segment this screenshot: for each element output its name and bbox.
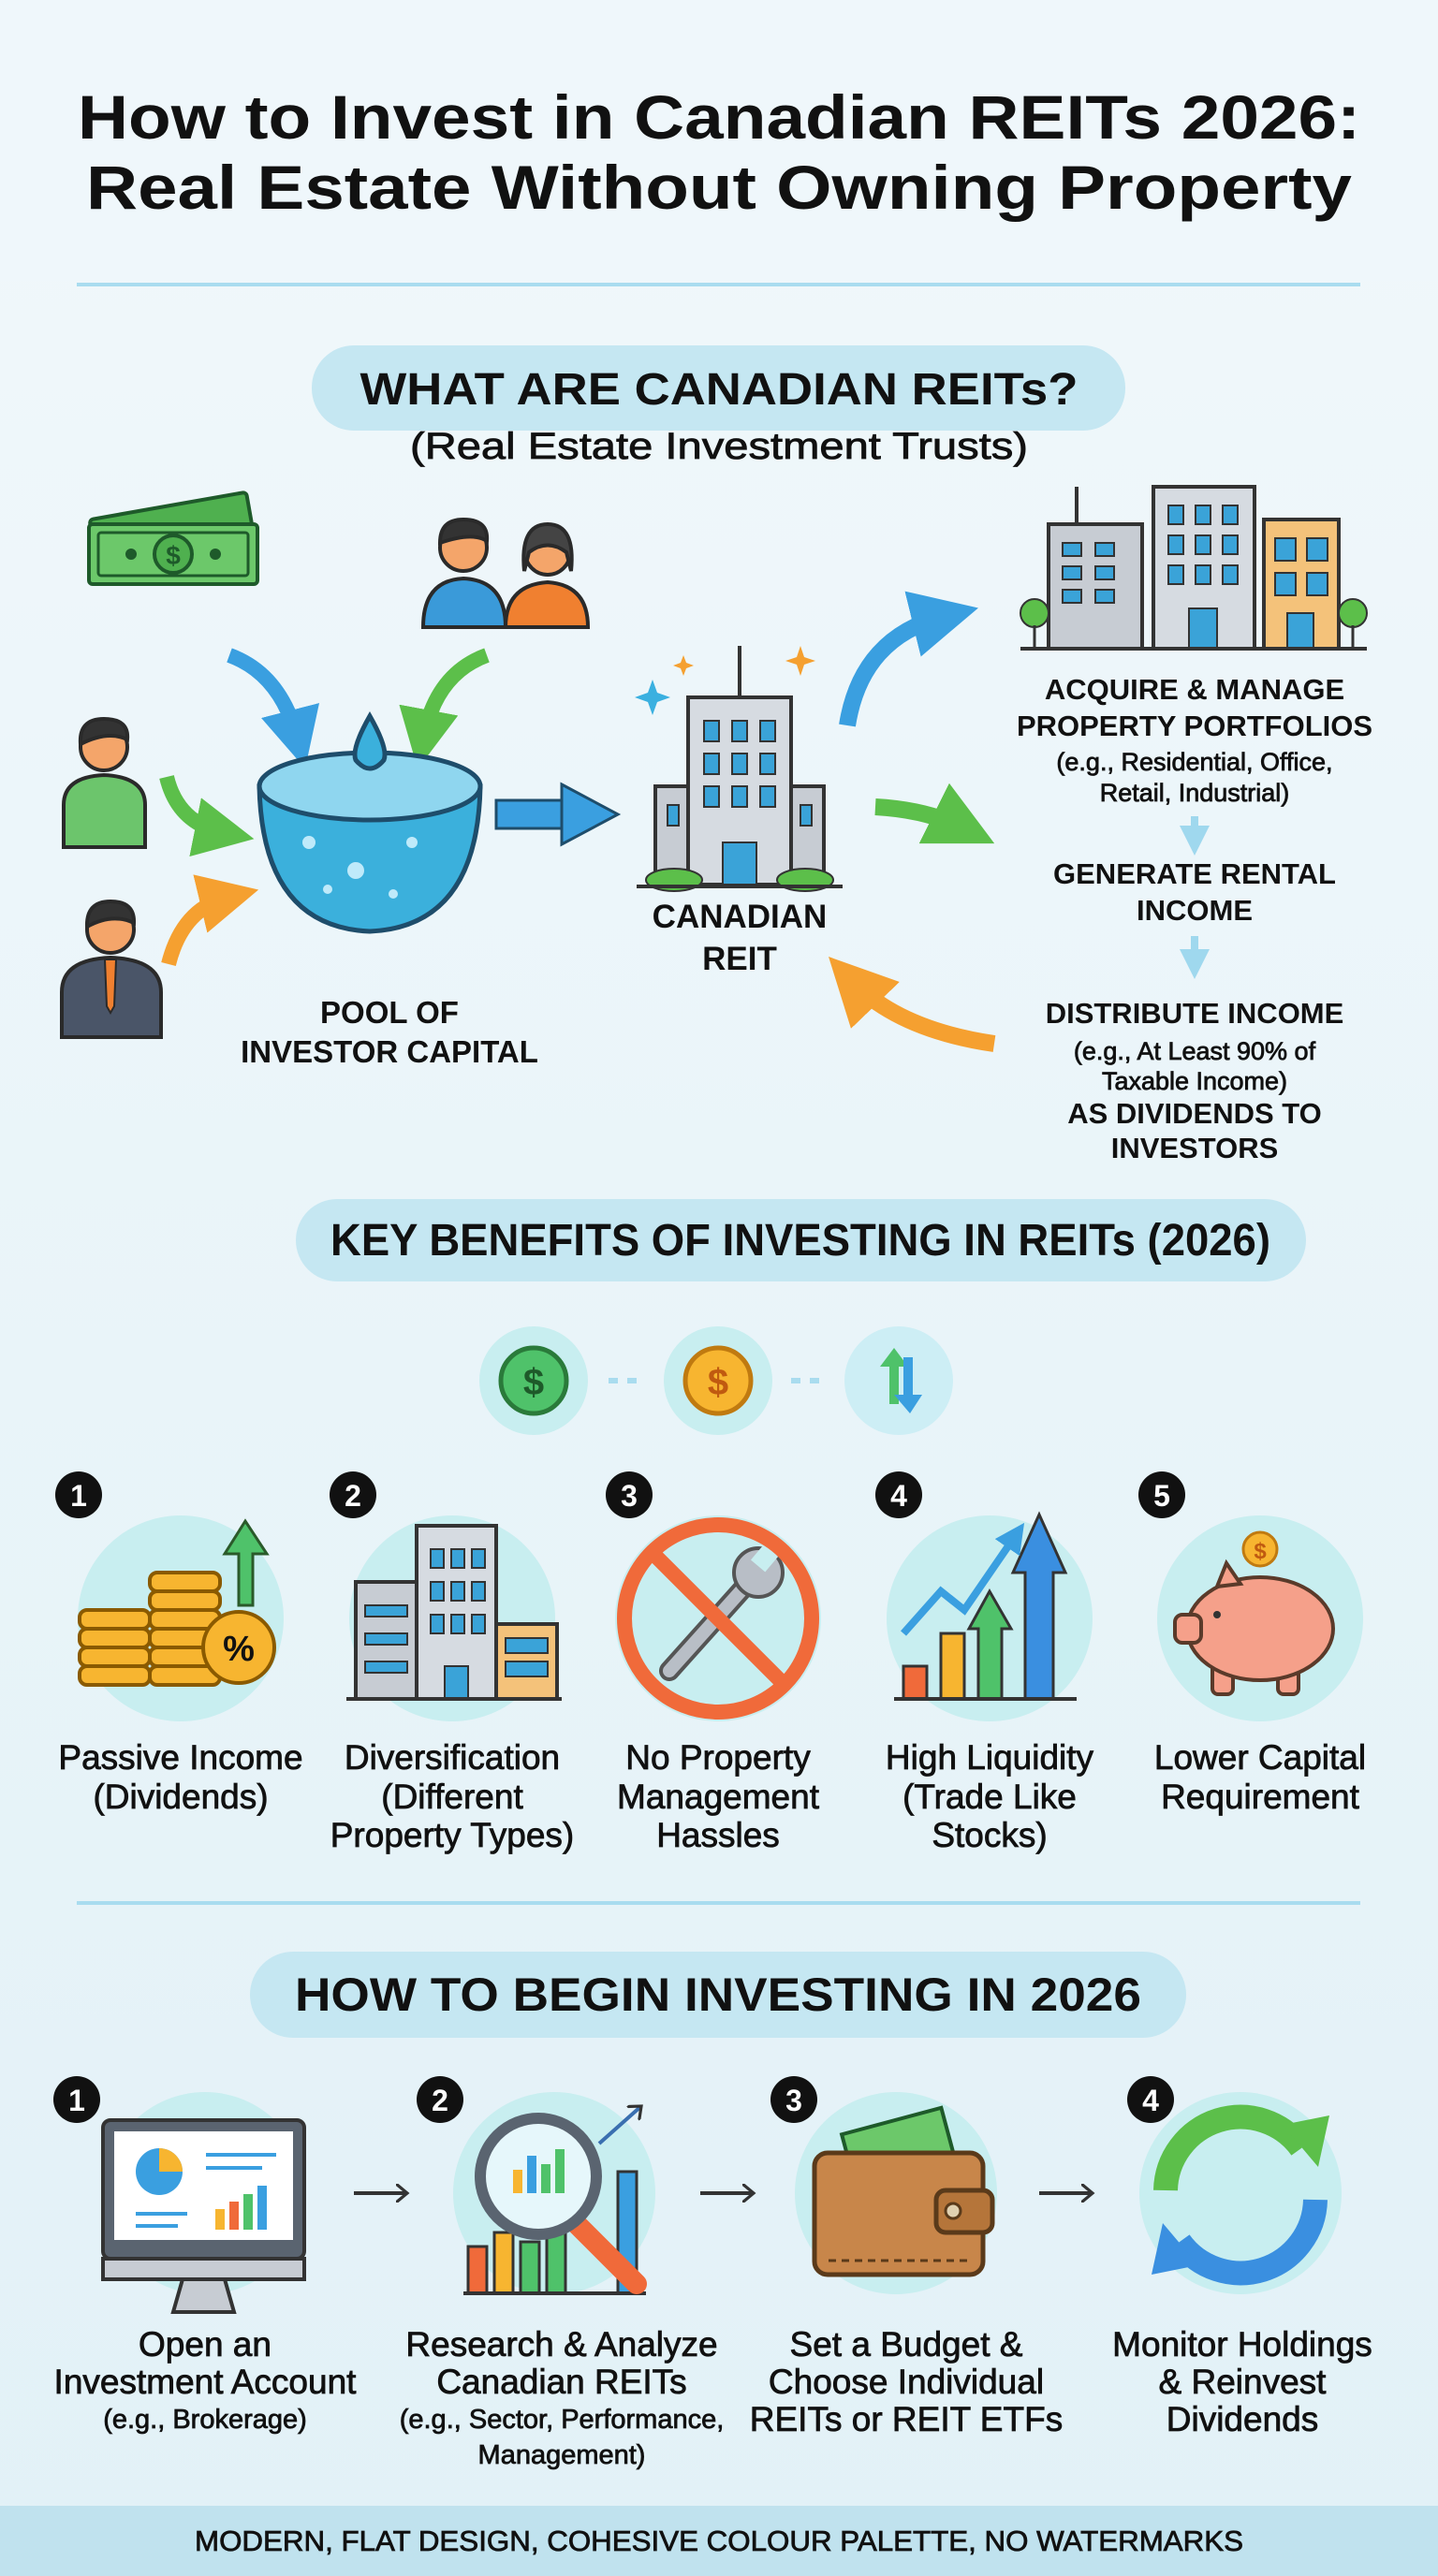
title (78, 82, 1360, 222)
arrow: dividends back (852, 981, 994, 1044)
arrow: investor to pool (167, 777, 225, 833)
step 4: reinvest cycle: Dividends (1167, 2400, 1318, 2438)
benefit 1: passive income: % (223, 1630, 255, 1669)
step 2: research: Management) (478, 2440, 645, 2470)
label: REIT (653, 899, 827, 977)
benefit 2: diversification: Diversification (345, 1738, 560, 1777)
footer: MODERN, FLAT DESIGN, COHESIVE COLOUR PALETTE, NO WATERMARKS (195, 2525, 1243, 2557)
step 3: wallet: REITs or REIT ETFs (750, 2400, 1063, 2438)
benefit 1: passive income: (Dividends) (93, 1778, 269, 1816)
heading: how to begin: HOW TO BEGIN INVESTING IN 2026 (295, 1969, 1141, 2021)
benefit 5: lower capital: Lower Capital (1154, 1738, 1366, 1777)
step 2: research: Research & Analyze (405, 2325, 718, 2364)
step 3: wallet (750, 2076, 1063, 2438)
text: distribute income (1046, 997, 1343, 1164)
text: distribute income: (e.g., At Least 90% of (1074, 1037, 1316, 1065)
arrow: down 1 (1191, 816, 1198, 841)
step 1: open account: Open an (139, 2325, 271, 2364)
text: generate income (1053, 857, 1336, 927)
icon: pool bowl (259, 716, 480, 931)
step 3: wallet: Set a Budget & (790, 2325, 1023, 2364)
benefit 4: liquidity: 4 (890, 1479, 907, 1513)
subtitle: (Real Estate Investment Trusts) (410, 426, 1028, 467)
text: distribute income: AS DIVIDENDS TO (1067, 1097, 1322, 1130)
heading: key benefits (296, 1199, 1306, 1281)
step 2: research: Canadian REITs (436, 2363, 687, 2401)
footer (0, 2506, 1438, 2576)
benefit 4: liquidity: (Trade Like (902, 1778, 1077, 1816)
arrow: step 2 to 3 (700, 2191, 754, 2195)
benefit 1: passive income: 1 (70, 1479, 87, 1513)
step 3: wallet: 3 (785, 2084, 802, 2117)
benefit 3: no management hassles: Hassles (656, 1816, 780, 1854)
title: Real Estate Without Owning Property (86, 153, 1352, 222)
benefit 5: lower capital (1138, 1471, 1366, 1816)
text: acquire & manage: Retail, Industrial) (1100, 779, 1289, 807)
label: pool: POOL OF (320, 995, 459, 1030)
icon: sparkles (635, 646, 815, 715)
icon: money: $ (166, 541, 181, 570)
benefit 4: liquidity (875, 1471, 1094, 1854)
benefit 4: liquidity: Stocks) (932, 1816, 1048, 1854)
heading: what are REITs (312, 345, 1125, 431)
step 1: open account: (e.g., Brokerage) (103, 2405, 307, 2435)
title: How to Invest in Canadian REITs 2026: (78, 82, 1360, 152)
text: acquire & manage: PROPERTY PORTFOLIOS (1017, 710, 1372, 742)
text: acquire & manage: ACQUIRE & MANAGE (1045, 673, 1344, 706)
arrow: money to pool (229, 655, 298, 739)
benefit 1: passive income: Passive Income (58, 1738, 303, 1777)
step 3: wallet: Choose Individual (769, 2363, 1044, 2401)
text: generate income: GENERATE RENTAL (1053, 857, 1336, 890)
icon row: coins: $ (523, 1362, 544, 1403)
arrow: REIT to income (875, 807, 964, 828)
arrow: REIT to properties (847, 616, 946, 725)
arrow: down 2 (1191, 936, 1198, 964)
benefit 2: diversification: 2 (345, 1479, 361, 1513)
step 2: research (400, 2076, 724, 2470)
benefit 5: lower capital: 5 (1153, 1479, 1170, 1513)
label: REIT: REIT (702, 941, 777, 977)
arrow: couple to pool (423, 655, 487, 739)
step 2: research: 2 (432, 2084, 448, 2117)
step 2: research: (e.g., Sector, Performance, (400, 2405, 724, 2435)
benefit 2: diversification: Property Types) (330, 1816, 574, 1854)
benefit 4: liquidity: High Liquidity (886, 1738, 1094, 1777)
text: generate income: INCOME (1137, 894, 1253, 927)
step 4: reinvest cycle (1112, 2076, 1372, 2438)
step 4: reinvest cycle: Monitor Holdings (1112, 2325, 1372, 2364)
arrow: step 3 to 4 (1039, 2191, 1093, 2195)
heading: what are REITs: WHAT ARE CANADIAN REITs? (360, 365, 1078, 415)
benefit 5: lower capital: $ (1254, 1539, 1267, 1564)
icon: REIT building (637, 646, 843, 891)
arrow: businessman to pool (169, 897, 229, 964)
icon row: coins (479, 1326, 953, 1435)
text: distribute income: Taxable Income) (1102, 1067, 1287, 1095)
benefit 2: diversification (330, 1471, 574, 1854)
benefit 3: no management hassles: No Property (625, 1738, 811, 1777)
heading: how to begin (250, 1952, 1186, 2038)
arrow: step 1 to 2 (354, 2191, 407, 2195)
benefit 5: lower capital: Requirement (1161, 1778, 1360, 1816)
heading: key benefits: KEY BENEFITS OF INVESTING IN REITs (2026) (330, 1216, 1270, 1266)
arrow: pool to REIT (496, 784, 618, 844)
benefit 3: no management hassles: Management (617, 1778, 820, 1816)
benefit 3: no management hassles (606, 1471, 821, 1854)
text: distribute income: INVESTORS (1111, 1132, 1278, 1164)
benefit 3: no management hassles: 3 (621, 1479, 638, 1513)
icon: investor green (64, 719, 145, 847)
text: acquire & manage (1017, 673, 1372, 807)
step 4: reinvest cycle: 4 (1142, 2084, 1159, 2117)
icon: businessman (62, 901, 161, 1037)
icon: property buildings (1020, 487, 1367, 649)
icon: money (89, 492, 257, 584)
benefit 1: passive income (55, 1471, 303, 1816)
step 1: open account: 1 (68, 2084, 85, 2117)
label: REIT: CANADIAN (653, 899, 827, 935)
label: pool (241, 995, 538, 1069)
step 1: open account: Investment Account (54, 2363, 357, 2401)
label: pool: INVESTOR CAPITAL (241, 1034, 538, 1069)
step 4: reinvest cycle: & Reinvest (1159, 2363, 1327, 2401)
benefit 2: diversification: (Different (381, 1778, 523, 1816)
step 1: open account (53, 2076, 357, 2435)
text: distribute income: DISTRIBUTE INCOME (1046, 997, 1343, 1030)
icon: couple (423, 520, 588, 627)
text: acquire & manage: (e.g., Residential, Office, (1056, 748, 1333, 776)
icon row: coins: $ (708, 1362, 728, 1403)
